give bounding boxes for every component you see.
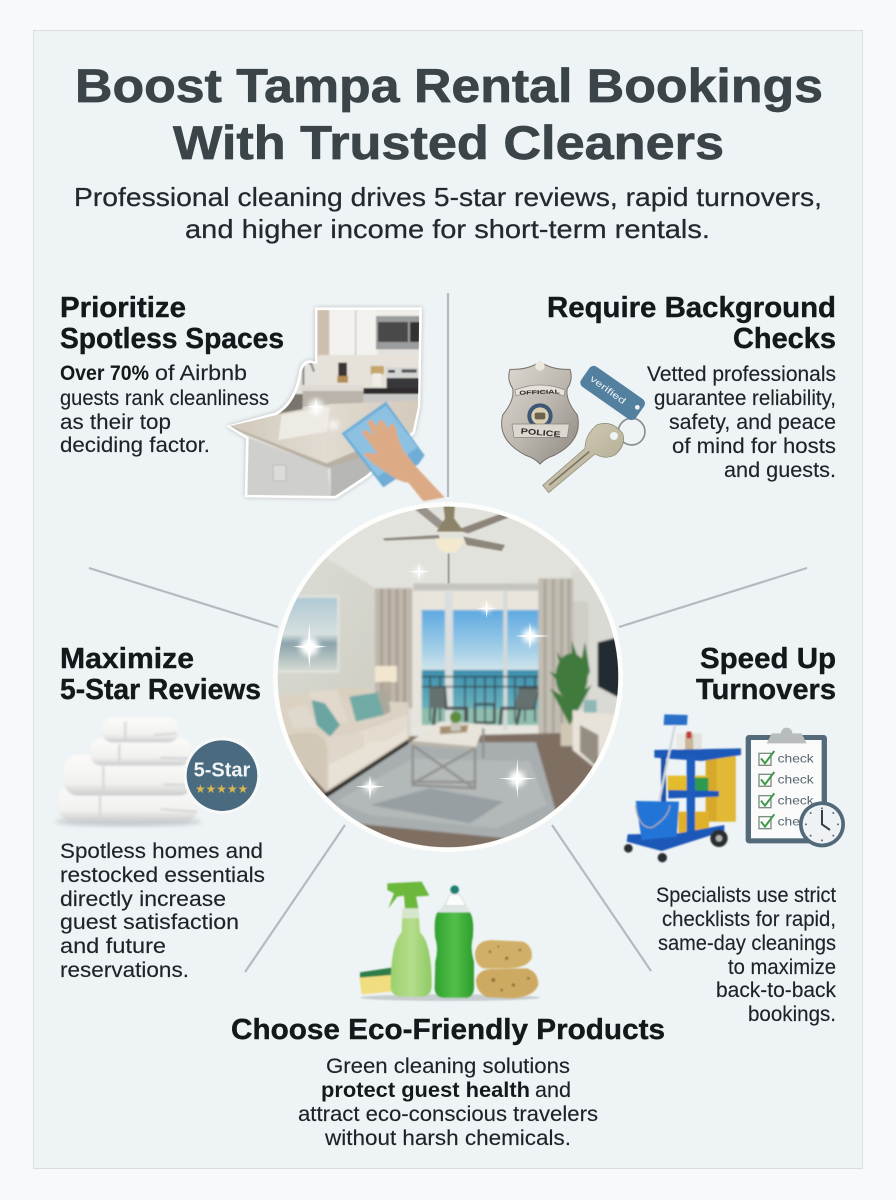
panel: require background checks <box>502 292 836 493</box>
subtitle: and higher income for short-term rentals. <box>185 214 710 244</box>
text: cleanliness statistic <box>60 361 269 457</box>
text: cleanliness statistic: Over 70% <box>60 361 149 385</box>
text: spotless homes: restocked essentials <box>60 863 265 887</box>
icon: checklist clipboard: check <box>778 774 814 787</box>
central photo: living room with ocean view <box>270 495 625 860</box>
subtitle: Professional cleaning drives 5-star reviews, rapid turnovers, <box>74 182 822 212</box>
heading: maximize 5-star reviews: Maximize <box>60 643 194 675</box>
icon: checklist clipboard <box>746 728 827 843</box>
title: With Trusted Cleaners <box>173 116 724 169</box>
heading: prioritize spotless spaces <box>60 292 284 355</box>
icon: verified tag: verified <box>588 374 628 406</box>
heading: choose eco-friendly products: Choose Eco-Friendly Products <box>231 1014 665 1046</box>
text: spotless homes: and future <box>60 934 166 958</box>
text: spotless homes: reservations. <box>60 958 189 982</box>
title: Boost Tampa Rental Bookings <box>75 59 823 112</box>
text: vetted professionals <box>647 362 836 482</box>
icon: spray bottle <box>387 882 432 997</box>
panel: choose eco-friendly products <box>231 882 665 1150</box>
heading: maximize 5-star reviews: 5-Star Reviews <box>60 674 261 706</box>
text: cleanliness statistic: of Airbnb <box>155 361 247 385</box>
title <box>75 59 823 169</box>
panel: maximize 5-star reviews <box>55 643 265 982</box>
text: specialists: same-day cleanings <box>658 931 836 955</box>
text: specialists <box>656 883 836 1026</box>
icon: key and ring <box>543 418 645 493</box>
icon: ceiling fan <box>383 505 511 583</box>
icon: dish soap bottle <box>435 885 474 998</box>
icon: kitchen counter being wiped <box>226 305 445 502</box>
heading: speed up turnovers: Turnovers <box>696 674 836 706</box>
icon: verified tag <box>578 364 647 422</box>
text: cleanliness statistic: as their top <box>60 410 171 434</box>
heading: prioritize spotless spaces: Prioritize <box>60 292 186 324</box>
text: vetted professionals: of mind for hosts <box>672 434 836 458</box>
icon: natural sponges <box>475 940 538 998</box>
icon: 5-star badge: ★★★★★ <box>195 782 248 796</box>
text: specialists: bookings. <box>748 1002 836 1026</box>
text: cleanliness statistic: guests rank cleanliness <box>60 386 269 410</box>
text: specialists: checklists for rapid, <box>662 907 836 931</box>
text: green cleaning solutions <box>298 1054 598 1150</box>
icon: police badge, verified tag and key <box>502 361 647 493</box>
subtitle <box>74 182 822 244</box>
text: spotless homes: Spotless homes and <box>60 839 263 863</box>
icon: 5-star badge: 5-Star <box>194 759 251 781</box>
text: vetted professionals: safety, and peace <box>669 410 836 434</box>
text: cleanliness statistic: deciding factor. <box>60 433 210 457</box>
icon: checklist clipboard: check <box>778 795 814 808</box>
text: spotless homes: directly increase <box>60 887 226 911</box>
text: spotless homes: guest satisfaction <box>60 910 239 934</box>
icon: checklist clipboard: check <box>778 816 814 829</box>
text: specialists: to maximize <box>728 955 836 979</box>
icon: police badge: OFFICIAL <box>519 389 561 397</box>
icon: cleaning cart and checklist <box>624 714 845 862</box>
text: green cleaning solutions: Green cleaning solutions <box>326 1054 570 1078</box>
icon: green cleaning products <box>359 882 540 1001</box>
text: specialists: Specialists use strict <box>656 883 836 907</box>
heading: speed up turnovers <box>696 643 836 706</box>
heading: require background checks: Require Background <box>547 292 836 324</box>
icon: yellow sponge <box>359 968 392 994</box>
text: green cleaning solutions: attract eco-conscious travelers <box>298 1102 598 1126</box>
panel: speed up turnovers <box>624 643 845 1026</box>
text: green cleaning solutions: without harsh chemicals. <box>324 1126 571 1150</box>
heading: require background checks: Checks <box>733 323 836 355</box>
sparkles <box>293 562 550 800</box>
heading: require background checks <box>547 292 836 355</box>
icon: 5-star badge <box>184 737 260 814</box>
text: spotless homes <box>60 839 265 982</box>
text: green cleaning solutions: and <box>535 1078 571 1102</box>
text: vetted professionals: and guests. <box>724 458 836 482</box>
heading: maximize 5-star reviews <box>60 643 261 706</box>
text: green cleaning solutions: protect guest health <box>321 1078 530 1102</box>
icon: checklist clipboard: check <box>778 753 814 766</box>
text: vetted professionals: Vetted professionals <box>647 362 836 386</box>
panel: prioritize spotless spaces <box>60 290 460 510</box>
connector lines <box>89 293 807 972</box>
icon: police badge: POLICE <box>520 427 562 439</box>
heading: speed up turnovers: Speed Up <box>700 643 836 675</box>
text: vetted professionals: guarantee reliability, <box>654 386 836 410</box>
icon: cleaning cart <box>624 714 741 862</box>
icon: clock <box>799 801 845 847</box>
icon: stacked towels with 5-star badge <box>55 718 260 826</box>
heading: prioritize spotless spaces: Spotless Spaces <box>60 323 284 355</box>
icon: towels <box>58 718 198 822</box>
icon: police badge <box>502 361 578 464</box>
text: specialists: back-to-back <box>716 978 836 1002</box>
